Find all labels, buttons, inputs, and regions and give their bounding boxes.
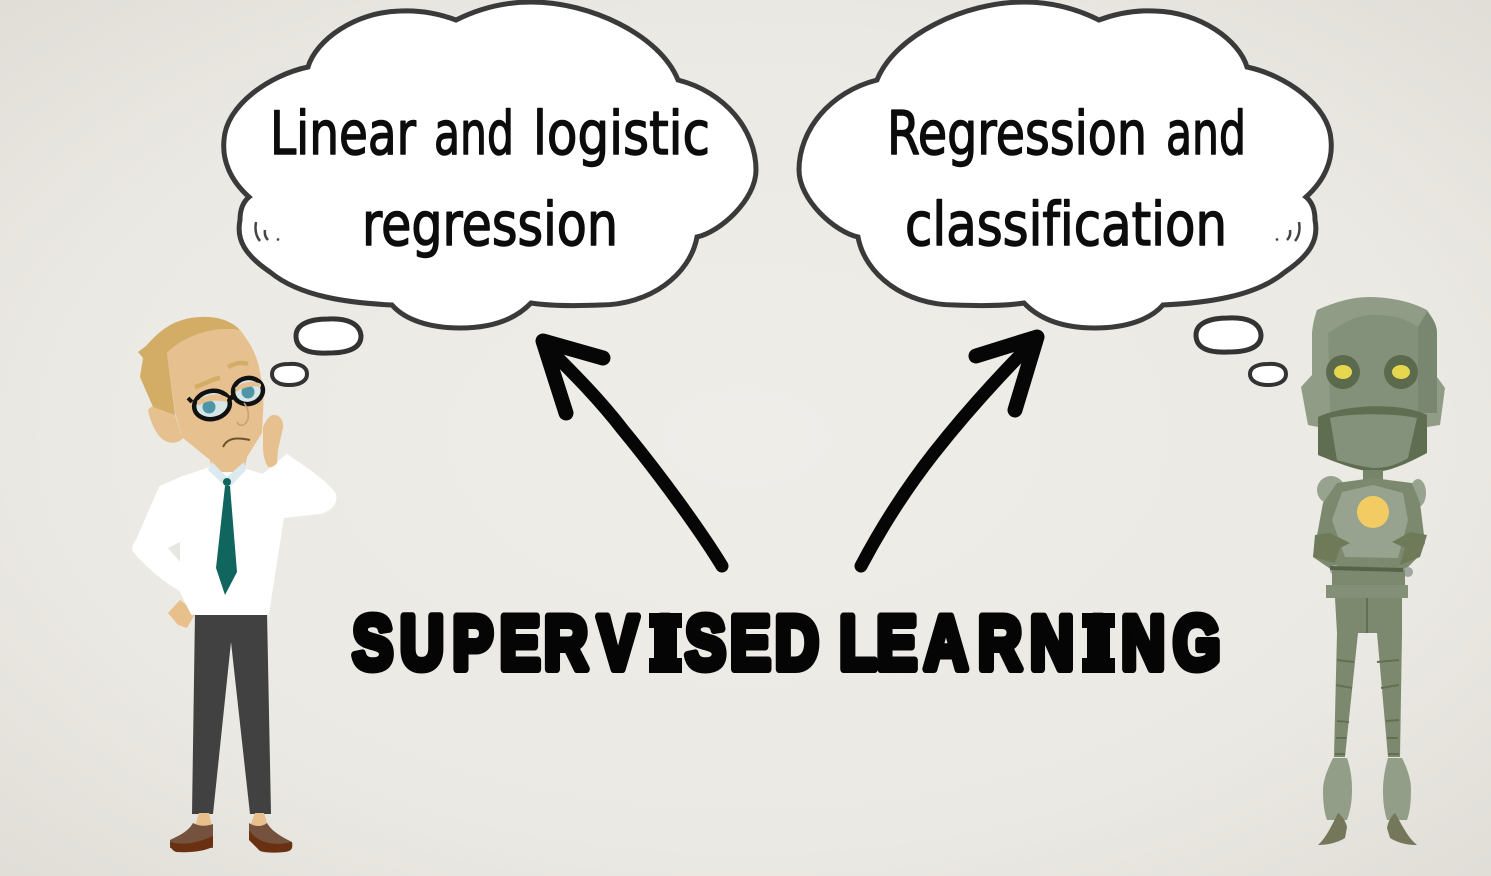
chest light — [1357, 496, 1389, 528]
trousers — [192, 612, 271, 814]
thought bubbles from the robot — [1196, 318, 1286, 385]
ankles — [195, 813, 268, 826]
neck and face — [167, 329, 263, 472]
shirt — [133, 455, 335, 614]
man character — [133, 317, 335, 853]
cloud text: and — [1166, 99, 1246, 169]
ear — [148, 407, 183, 443]
cloud text — [270, 99, 710, 260]
hips and legs — [1334, 598, 1402, 757]
cloud text: and — [434, 99, 514, 169]
cloud inner marks — [256, 222, 279, 241]
waist — [1332, 570, 1405, 587]
raised hand — [263, 415, 283, 467]
cloud text: Linear — [270, 99, 416, 169]
hand on hip — [168, 600, 196, 628]
right shoe — [249, 823, 292, 853]
cloud inner marks — [1276, 222, 1300, 241]
thought cloud: regression and classification — [799, 2, 1331, 328]
cloud text: regression — [362, 190, 618, 260]
cloud text: classification — [905, 190, 1227, 260]
hair — [138, 317, 240, 415]
torso — [1313, 478, 1425, 570]
collar — [208, 462, 246, 489]
neck — [1363, 470, 1383, 483]
calves — [1323, 758, 1352, 820]
cloud text — [887, 99, 1246, 260]
waist knobs — [1330, 565, 1340, 575]
feet — [1318, 813, 1347, 845]
nose — [237, 403, 248, 425]
thought cloud: linear and logistic regression — [224, 2, 756, 328]
leg joints — [1335, 598, 1399, 754]
eyes — [202, 400, 216, 414]
cloud text: Regression — [887, 99, 1147, 169]
title: supervised learning: SUPERVISED LEARNING — [353, 601, 1220, 686]
shoulders — [1317, 476, 1345, 504]
folded arms — [1313, 533, 1350, 563]
head shade — [1328, 315, 1418, 413]
cloud text: logistic — [533, 99, 710, 169]
head — [1301, 297, 1445, 427]
arrow: to regression and classification — [861, 337, 1037, 566]
eyebrows — [195, 363, 248, 387]
robot character — [1301, 297, 1445, 845]
tie — [216, 478, 237, 595]
glasses — [188, 375, 265, 422]
arrow: to linear and logistic regression — [543, 341, 722, 566]
thought bubbles from the man — [272, 319, 361, 385]
mouth — [223, 438, 250, 447]
jaw — [1318, 406, 1427, 472]
shirt notch — [168, 542, 180, 562]
eyes — [1326, 355, 1360, 389]
left shoe — [170, 823, 213, 852]
chest plate — [1332, 485, 1408, 558]
